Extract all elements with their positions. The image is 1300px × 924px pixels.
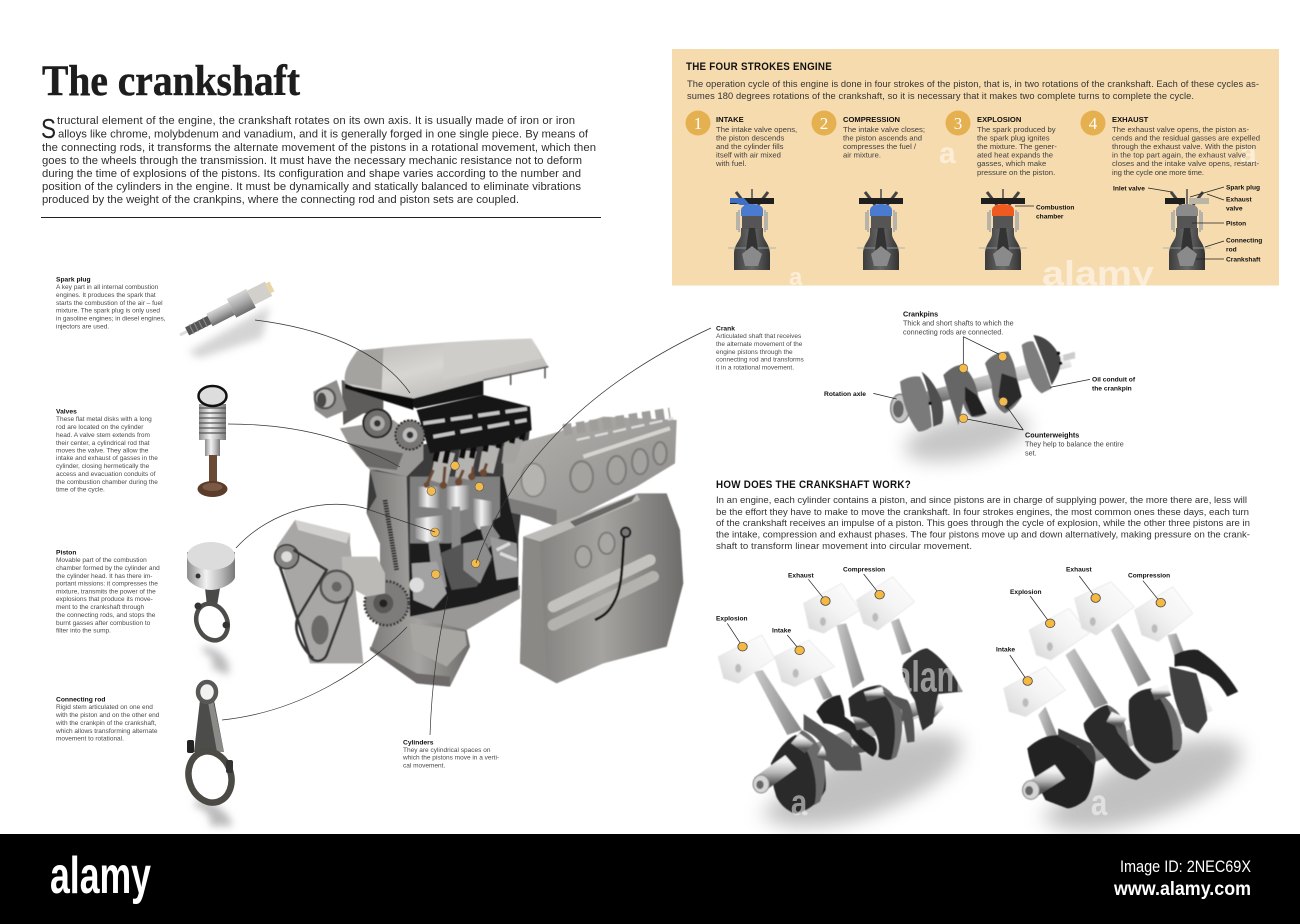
intro text block: the connecting rods, it transforms the alternate movement of the pistons in a rotational movement, which then [42, 142, 596, 154]
heading: how does the crankshaft work: HOW DOES THE CRANKSHAFT WORK? [716, 479, 911, 491]
step 4: exhaust [1080, 110, 1260, 177]
how it works text [716, 495, 1250, 552]
step 2: compression: 2 [820, 114, 828, 133]
step 2: compression [812, 110, 925, 160]
panel watermark: a [939, 137, 956, 170]
label: valves [56, 408, 158, 494]
step 4: exhaust: cends and the residual gasses are expelled [1112, 134, 1260, 142]
crankshaft labels A: Exhaust [788, 572, 814, 580]
how it works text: shaft to transform linear movement into circular movement. [716, 541, 972, 552]
crankshaft shadow [900, 402, 1033, 471]
step 3: explosion [946, 110, 1057, 177]
step 4: exhaust: EXHAUST [1112, 115, 1149, 124]
label: cylinders: cal movement. [403, 762, 445, 770]
label: spark plug: A key part in all internal combustion [56, 284, 159, 291]
step 4: exhaust: The exhaust valve opens, the piston as- [1112, 125, 1249, 134]
diagram: exhaust cylinder with labels: Piston [1226, 220, 1246, 228]
intro text block: alloys like chrome, molybdenum and vanadium, and it is generally forged in one single piece. By means of [58, 128, 589, 140]
engine callout dots [427, 461, 484, 579]
how it works text: of the crankshaft receives an impulse of a piston. This goes through the cycle of explosion, while the other three pistons are in [716, 518, 1250, 529]
label: counterweights [1025, 430, 1124, 458]
step 4: exhaust: ing the cycle one more time. [1112, 168, 1204, 177]
shaft nose [753, 762, 791, 793]
label: oil conduit: the crankpin [1092, 386, 1132, 392]
piston dots and pointers [1010, 576, 1165, 685]
label: piston: the cylinder head. It has there im- [56, 573, 152, 580]
label: piston: Piston [56, 550, 76, 556]
crankshaft labels B: Exhaust [1066, 566, 1092, 574]
crankshaft labels B: Intake [996, 646, 1015, 654]
label: crankpins: Thick and short shafts to which the [903, 318, 1014, 328]
label: counterweights: They help to balance the entire [1025, 440, 1124, 448]
diagram: exhaust cylinder with labels: rod [1226, 246, 1237, 254]
label: cylinders: Cylinders [403, 740, 434, 746]
shadow [762, 733, 961, 827]
label: piston: the connecting rods, and stops the [56, 612, 156, 619]
label: combustion chamber: Combustion [1036, 204, 1074, 212]
how it works text: the intake, compression and exhaust phases. The four pistons move up and down alternatively, making pressure on the crank- [716, 530, 1250, 540]
pistons [415, 485, 493, 544]
valve cover [345, 338, 548, 410]
crankshaft dots [959, 352, 1008, 423]
intro text block: produced by the weight of the crankpins, where the connecting rod and piston sets are coupled. [42, 194, 519, 206]
step 4: exhaust: 4 [1089, 114, 1098, 133]
step 2: compression: the piston ascends and [843, 134, 922, 142]
label: valves: rod are located on the cylinder [56, 424, 144, 431]
label: valves: Valves [56, 408, 77, 416]
shadow [1042, 739, 1241, 830]
label: cylinders: They are cylindrical spaces on [403, 747, 491, 754]
watermark: a [1091, 783, 1108, 824]
website: www.alamy.com [1113, 879, 1251, 900]
panel intro text: The operation cycle of this engine is done in four strokes of the piston, that is, in two rotations of the crankshaft. Each of these cycles as- [687, 79, 1259, 89]
engine backing [367, 427, 530, 623]
watermark: a [791, 783, 808, 824]
label: counterweights: set. [1025, 448, 1037, 458]
label: counterweights: Counterweights [1025, 430, 1079, 440]
label: crank: connecting rod and transforms [716, 356, 805, 364]
label: valves: time of the cycle. [56, 486, 105, 494]
label: spark plug: engines. It produces the spark that [56, 292, 156, 299]
step 2: compression: The intake valve closes; [843, 125, 925, 134]
diagram: exhaust cylinder with labels [1113, 184, 1262, 270]
step 4: exhaust: through the exhaust valve. With the piston [1112, 142, 1256, 151]
label: connecting rod: with the crankpin of the crankshaft, [55, 720, 157, 727]
diagram: exhaust cylinder with labels: valve [1226, 206, 1243, 212]
label: crank: Crank [716, 326, 735, 332]
label: connecting rod: movement to rotational. [56, 736, 124, 742]
label: connecting rod: which allows transforming alternate [55, 728, 158, 735]
label: connecting rod: with the piston and on the other end [55, 712, 160, 719]
label: valves: intake and exhaust of gasses in the [56, 455, 158, 462]
throttle body [313, 380, 347, 418]
step 3: explosion: EXPLOSION [977, 115, 1021, 124]
step 1: intake: itself with air mixed [716, 150, 781, 160]
label: piston: mixture, transmits the power of the [56, 588, 156, 596]
icon: connecting rod [182, 682, 238, 826]
intro text block: tructural element of the engine, the crankshaft rotates on its own axis. It is usually made of iron or iron [57, 115, 575, 127]
diagram: exhaust cylinder with labels: Exhaust [1226, 196, 1252, 204]
label: crankpins [903, 310, 1014, 336]
connecting rods [754, 618, 912, 735]
label: crank: Articulated shaft that receives [716, 333, 802, 340]
how it works text: In an engine, each cylinder contains a piston, and since pistons are in charge of supplying power, the more there are, less will [716, 495, 1247, 506]
step 4: exhaust: in the top part again, the exhaust valve [1112, 150, 1246, 160]
how it works text: be the effort they have to make to move the crankshaft. In four strokes engines, the most common ones these days, each turn [716, 507, 1249, 518]
step 3: explosion: 3 [954, 114, 962, 133]
left gear housing [340, 420, 423, 477]
step 1: intake [686, 110, 797, 168]
label: piston: burnt gasses after combustion to [56, 620, 151, 627]
panel watermark [789, 137, 1257, 293]
intro text block: during the time of explosions of the pistons. Its configuration and shape varies according to the number and [42, 168, 581, 180]
diagram: exhaust cylinder with labels: Connecting [1226, 238, 1262, 244]
step 1: intake: 1 [694, 114, 702, 133]
crank body [1023, 650, 1238, 808]
panel intro text: sumes 180 degrees rotations of the crankshaft, so it is necessary that it makes two complete turns to complete the cycle. [687, 91, 1194, 101]
label: piston: chamber formed by the cylinder and [56, 565, 160, 572]
label: cylinders: which the pistons move in a verti- [402, 754, 499, 762]
step 3: explosion: the mixture. The gener- [977, 142, 1057, 151]
crankshaft body [891, 335, 1075, 432]
label: valves: moves the valve. They allow the [56, 448, 149, 454]
label: rotation axle: Rotation axle [824, 391, 866, 398]
camshaft block [417, 395, 532, 453]
piston dots and pointers [727, 574, 884, 655]
pistons [718, 577, 915, 687]
intro text block: position of the cylinders in the engine. It must be dynamically and statically balanced to eliminate vibrations [42, 181, 581, 193]
step 4: exhaust: closes and the intake valve opens, restart- [1112, 159, 1259, 168]
cam gears [363, 409, 425, 450]
label: connecting rod [55, 696, 160, 742]
right cylinder head [500, 413, 677, 527]
step 1: intake: INTAKE [716, 115, 744, 124]
label: piston: explosions that produce its move- [56, 596, 153, 603]
panel heading: THE FOUR STROKES ENGINE [686, 61, 832, 73]
label: spark plug: starts the combustion of the air – fuel [56, 300, 163, 307]
label: cylinders [402, 740, 499, 770]
label: combustion chamber: chamber [1036, 214, 1064, 220]
image id: Image ID: 2NEC69X [1120, 857, 1251, 876]
timing belt [385, 500, 397, 570]
engine illustration [275, 338, 683, 687]
step 2: compression: air mixture. [843, 150, 881, 160]
label: valves: the combustion chamber during the [56, 479, 158, 486]
watermark [791, 652, 964, 824]
diagram: exhaust cylinder with labels: Spark plug [1226, 184, 1260, 192]
crankshaft in engine [409, 507, 518, 608]
label: crank: engine pistons through the [716, 349, 793, 356]
step 1: intake: the piston descends [716, 134, 785, 142]
diagram: compression cylinder [857, 189, 905, 270]
watermark: alam [895, 652, 964, 701]
crankshaft labels B: Explosion [1010, 589, 1042, 596]
diagram: exhaust cylinder with labels: Crankshaft [1226, 256, 1261, 264]
right engine block [520, 493, 683, 683]
label: connecting rod: Connecting rod [56, 696, 105, 704]
pistons [1004, 582, 1193, 717]
crankshaft labels B: Compression [1128, 572, 1170, 580]
label: valves: head. A valve stem extends from [56, 432, 150, 439]
label: spark plug: injectors are used. [56, 324, 109, 330]
intro text block: goes to the wheels through the transmission. It must have the necessary mechanic resistance not to deform [42, 155, 582, 167]
label: crank [716, 326, 805, 372]
step 2: compression: COMPRESSION [843, 115, 900, 124]
label: piston: filter into the sump. [56, 628, 111, 634]
label: valves: These flat metal disks with a long [56, 416, 152, 423]
label: piston: portant missions: it compresses the [56, 580, 158, 588]
label: spark plug: in gasoline engines; in diesel engines, [56, 316, 166, 322]
crankshaft labels B [996, 566, 1170, 654]
label: piston: Movable part of the combustion [56, 557, 147, 564]
step 3: explosion: ated heat expands the [977, 150, 1053, 160]
timing cover assembly [275, 520, 385, 663]
label: combustion chamber [1015, 204, 1074, 220]
label: oil conduit: Oil conduit of [1092, 376, 1136, 384]
label: crank: the alternate movement of the [716, 341, 803, 348]
footer bar [0, 834, 1300, 924]
crankshaft labels A [716, 566, 885, 634]
label: spark plug: mixture. The spark plug is only used [56, 308, 160, 314]
label: valves: their center, a cylindrical rod that [56, 440, 150, 447]
icon: valve [198, 386, 228, 497]
diagram: exhaust cylinder with labels: Inlet valve [1113, 186, 1145, 192]
icon: piston [187, 542, 235, 675]
valves and injectors [424, 413, 527, 489]
leader lines from components to engine [222, 320, 711, 735]
label: valves: access and evacuation conduits of [56, 471, 156, 478]
step 3: explosion: gasses, which make [977, 159, 1046, 168]
diagram: intake cylinder [728, 189, 776, 270]
cutaway interior [410, 477, 518, 617]
crankshaft labels A: Intake [772, 628, 791, 634]
panel: the four strokes engine [672, 49, 1279, 293]
sump floor [410, 585, 520, 630]
icon: spark plug [175, 278, 277, 358]
label: valves: cylinder, closing hermetically the [56, 463, 150, 470]
crankshaft pointers [873, 337, 1090, 430]
label: crank: it in a rotational movement. [716, 364, 794, 372]
oil pan gear [365, 581, 409, 625]
cylinder walls [410, 477, 500, 543]
connecting rods [1038, 623, 1184, 737]
main engine column and sump [367, 470, 470, 687]
title: The crankshaft [42, 58, 301, 105]
panel watermark: a [789, 264, 803, 291]
diagram: explosion cylinder [979, 189, 1027, 270]
step 3: explosion: the spark plug ignites [977, 134, 1050, 142]
shaft nose [1023, 772, 1060, 799]
logo: alamy [50, 847, 151, 905]
crankshaft illustration: firing order A [718, 574, 964, 827]
step 3: explosion: The spark produced by [977, 125, 1056, 134]
label: connecting rod: Rigid stem articulated on one end [56, 704, 153, 711]
step 1: intake: and the cylinder fills [716, 142, 784, 151]
crankshaft labels A: Compression [843, 566, 885, 574]
label: oil conduit [1092, 376, 1136, 392]
step 3: explosion: pressure on the piston. [977, 168, 1055, 177]
step 1: intake: with fuel. [715, 159, 746, 168]
intro text block: S [41, 113, 56, 144]
crank body [753, 648, 963, 814]
crankshaft labels A: Explosion [716, 616, 748, 622]
label: piston: ment to the crankshaft through [56, 604, 145, 611]
panel watermark: alamy [1042, 255, 1154, 293]
step 1: intake: The intake valve opens, [716, 125, 797, 134]
intro text block [41, 113, 596, 206]
panel intro text [687, 79, 1259, 101]
crankshaft illustration, top right [873, 335, 1090, 471]
panel watermark: a [1240, 137, 1257, 170]
label: crankpins: connecting rods are connected. [903, 328, 1003, 336]
label: spark plug: Spark plug [56, 276, 91, 284]
label: piston [56, 550, 160, 634]
crankshaft illustration: firing order B [1004, 576, 1241, 830]
step 2: compression: compresses the fuel / [843, 142, 917, 151]
label: spark plug [56, 276, 166, 330]
label: crankpins: Crankpins [903, 310, 938, 318]
